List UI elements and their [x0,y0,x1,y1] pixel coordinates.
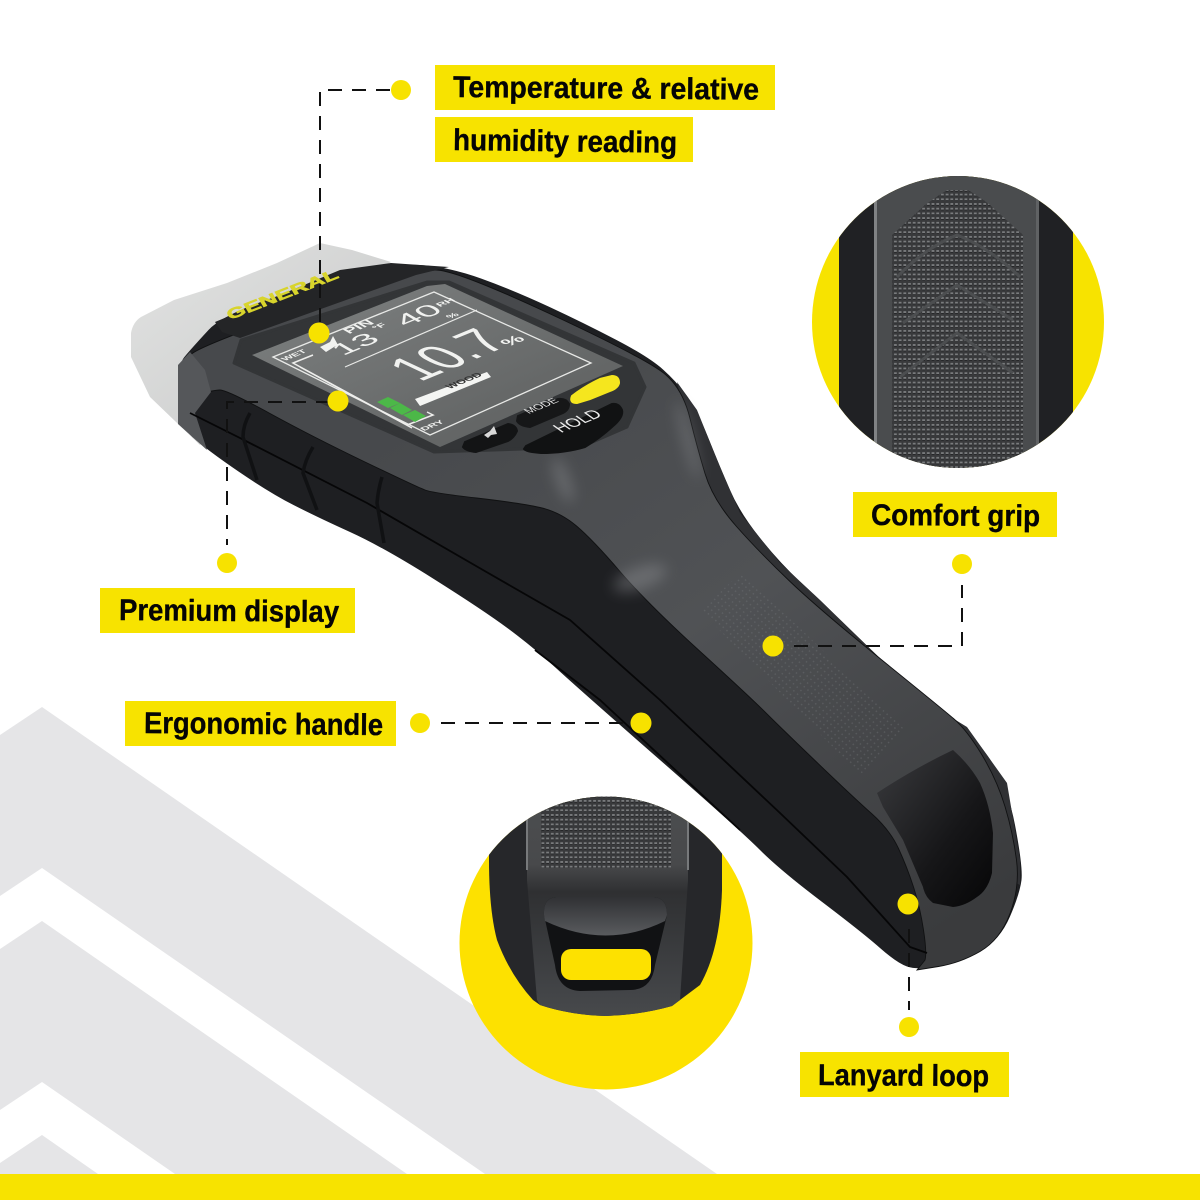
leader: lanyard loop [898,894,919,1037]
moisture scale frame [293,355,433,428]
LCD frame [273,292,591,435]
label: lanyard loop: Lanyard loop [818,1059,989,1093]
mode button [517,396,569,427]
lanyard recess [877,750,993,907]
LCD texts: DRY [418,419,448,432]
product: moisture meter [131,243,1022,970]
screen bezel [234,282,645,452]
inset circle: lanyard loop close-up [460,790,752,1090]
dark top band with brand [215,263,449,338]
LCD texts: PIN [340,318,378,336]
LCD texts: 13 [324,329,386,359]
label: ergonomic handle: Ergonomic handle [144,707,383,742]
seam lines [190,413,927,953]
probe tip [131,243,391,445]
bottom yellow band [0,1174,1200,1200]
leader: comfort grip [762,554,972,656]
LCD texts [279,297,530,432]
right rim [677,382,1020,885]
label: lanyard loop [800,1052,1009,1097]
label: premium display: Premium display [119,594,340,629]
hold button: HOLD [548,406,606,435]
LCD divider [345,310,477,367]
label: temperature & relative: Temperature & relative [453,71,759,107]
speaker button [463,424,517,452]
mode button: MODE [521,396,562,415]
material bar [415,372,491,406]
leader: ergonomic handle [410,712,652,734]
side collar [178,352,211,450]
hold button [524,404,622,453]
moisture bars [377,397,426,422]
LCD texts: 40 [387,300,449,330]
LCD [252,284,623,447]
leader: premium display [217,390,348,573]
label: comfort grip: Comfort grip [871,499,1040,533]
label: humidity reading: humidity reading [453,124,677,160]
leader: temperature [308,80,411,344]
LCD texts: % [444,312,462,320]
top face [181,270,1017,970]
grip notches [243,413,384,543]
label: comfort grip [853,492,1057,537]
brand name: GENERAL [224,267,342,323]
LCD texts: WET [279,348,310,362]
background chevrons [0,707,717,1174]
LCD texts: 10.7 [373,322,523,387]
handle texture [700,572,905,775]
LCD texts: % [497,333,530,349]
LCD texts: WOOD [444,372,485,390]
inset circle: comfort grip close-up [812,170,1104,474]
rubber side body [178,265,1022,968]
LCD texts: °F [370,322,389,331]
highlights [548,400,703,598]
LCD speaker icon [320,336,338,352]
power button [571,376,619,403]
LCD texts: RH [434,297,458,308]
